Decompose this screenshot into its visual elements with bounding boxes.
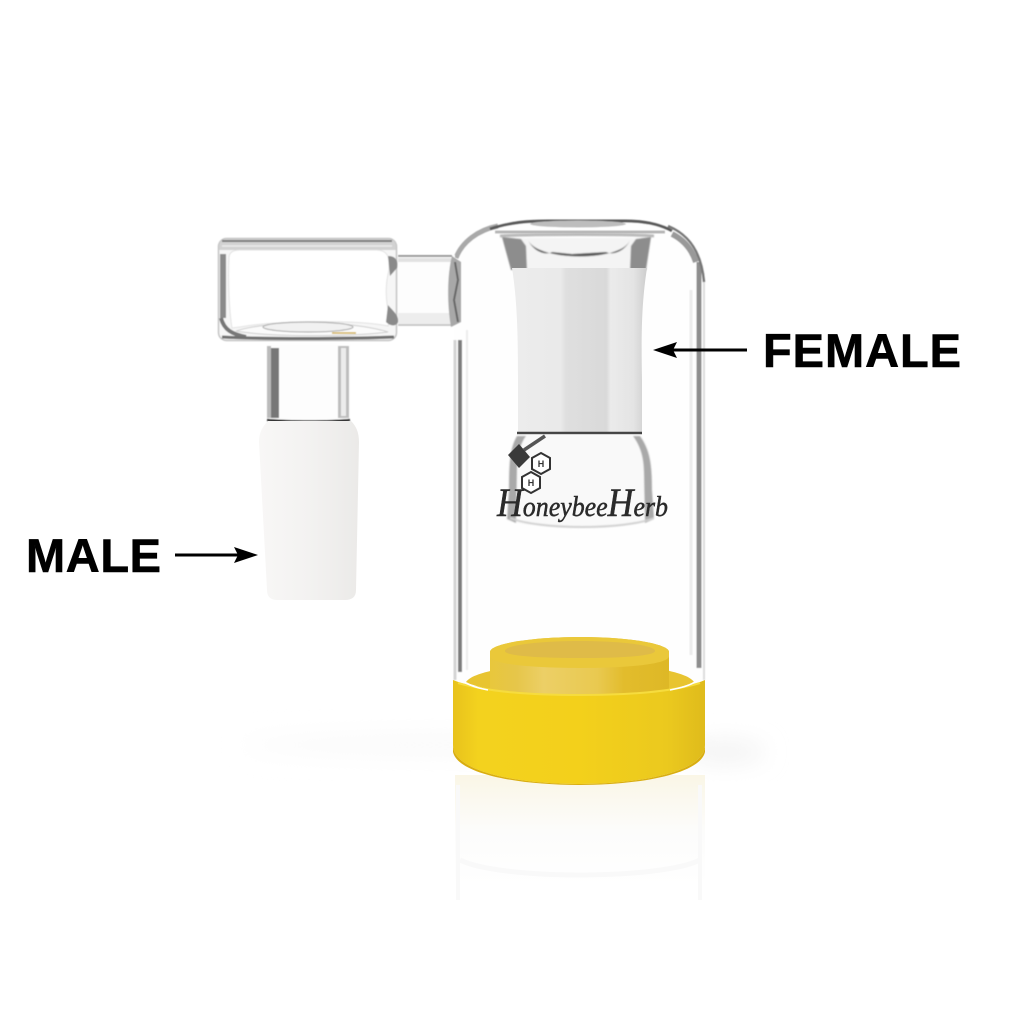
- yellow base band: [453, 680, 705, 784]
- clear stem: [267, 344, 350, 422]
- chamber glass fill: [454, 221, 705, 690]
- logo wordmark: HoneybeeHerb: [496, 480, 668, 525]
- bowl inner cavity: [229, 250, 390, 328]
- text: MALE: MALE: [26, 529, 161, 582]
- top rim: [490, 221, 672, 231]
- bowl base line: [222, 337, 394, 338]
- icon: dipper and hexagons: H: [538, 459, 544, 469]
- label: MALE with arrow: [26, 529, 258, 582]
- bowl floor: [236, 323, 388, 336]
- female joint neck: [500, 234, 654, 270]
- panel: bowl: [218, 238, 398, 340]
- text: FEMALE: FEMALE: [763, 324, 961, 377]
- panel: male joint: [259, 344, 359, 600]
- left wall: [454, 340, 456, 680]
- label: FEMALE with arrow: [653, 324, 961, 377]
- icon: dipper and hexagons: [508, 436, 550, 493]
- frosted male taper: [259, 421, 359, 600]
- arrow: female: [653, 342, 747, 358]
- bowl left wall: [220, 254, 226, 318]
- icon: dipper and hexagons: H: [528, 478, 534, 488]
- bowl right junction: [388, 256, 397, 276]
- panel: side connector tube: [395, 255, 461, 327]
- panel: female joint: [500, 234, 654, 528]
- left shoulder: [456, 226, 498, 258]
- female joint ring: [517, 432, 642, 434]
- bowl rim: [219, 239, 396, 250]
- inner yellow cup: [490, 637, 669, 696]
- panel: yellow silicone base: [453, 637, 705, 785]
- logo: HoneybeeHerb: [496, 436, 668, 525]
- panel: main glass chamber: [454, 220, 705, 690]
- cup floor: [466, 669, 694, 696]
- ground shadow and reflection: [240, 733, 765, 900]
- arrow: male: [175, 547, 258, 563]
- frosted female sleeve: [512, 268, 647, 432]
- lower bell: [506, 434, 654, 528]
- right wall: [696, 262, 702, 668]
